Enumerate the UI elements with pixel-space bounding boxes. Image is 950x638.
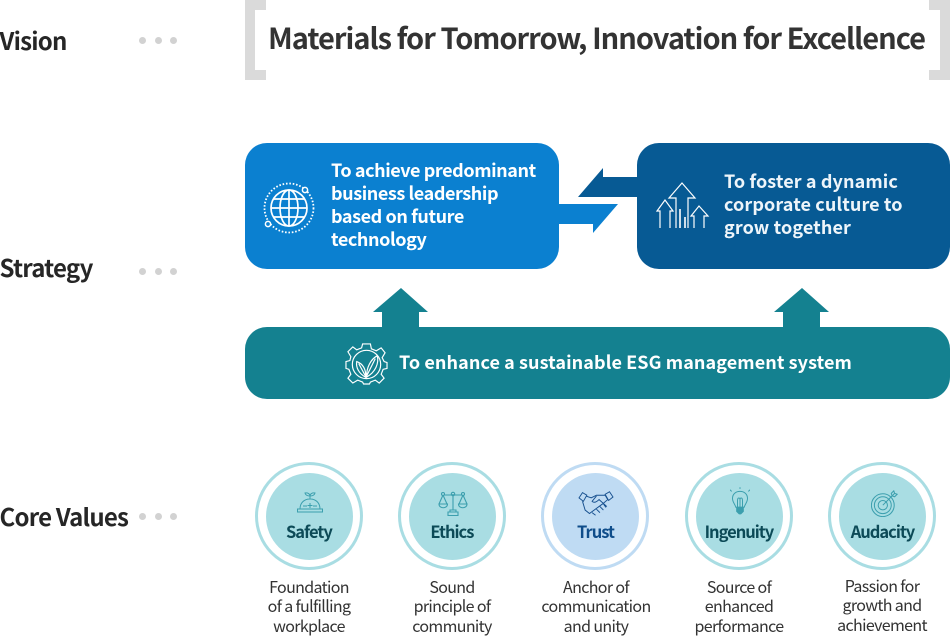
text: Safety description: of a fulfilling [268,593,350,617]
text: Trust description: and unity [564,613,628,637]
core value: Ethics [398,462,506,570]
vision statement: Materials for Tomorrow, Innovation for Excellence [268,16,925,58]
text: business leadership: based on future [331,203,464,229]
heading: Vision: Vision [0,22,67,57]
icon: light bulb [730,487,750,514]
left bracket [245,0,266,80]
text: corporate culture: grow together [724,214,851,240]
text: Ethics description: principle of [414,593,490,617]
text: Audacity description: Passion for [845,573,919,597]
text: business leadership: To achieve predominant [331,157,536,183]
text: Ingenuity description [694,574,784,637]
label: Audacity: Audacity [851,519,914,543]
core value: Trust [541,462,649,570]
panel: ESG [245,327,950,399]
text: Trust description: Anchor of [563,574,629,598]
text: corporate culture [724,168,903,240]
text: Trust description: communication [541,593,651,617]
icon: handshake [578,491,614,516]
label: Ethics: Ethics [430,519,473,543]
text: corporate culture: corporate culture to [724,191,903,217]
icon: scales [438,492,468,516]
text: corporate culture: To foster a dynamic [724,168,898,194]
text: Safety description: Foundation [269,574,349,598]
text: business leadership: business leadership [331,180,498,206]
text: Audacity description [837,573,928,636]
dots: Vision [139,37,177,44]
text: Audacity description: achievement [837,612,927,636]
core value: Safety [255,462,363,570]
text: Ingenuity description: enhanced [705,593,773,617]
label: Ingenuity: Ingenuity [705,519,773,543]
arrow: ESG to corporate culture [774,288,829,327]
dots: Strategy [139,268,177,275]
panel: corporate culture [637,143,950,269]
icon: target [871,490,898,517]
text: Audacity description: growth and [842,592,922,616]
arrow: blue to dark [559,204,618,233]
text: Ingenuity description: Source of [707,574,771,598]
text: Ethics description: community [412,613,492,637]
core value: Ingenuity [685,462,793,570]
right bracket [929,0,950,80]
heading: Core Values: Core Values [0,498,128,533]
text: business leadership [331,157,536,252]
text: Safety description: workplace [273,613,345,637]
arrow: dark to blue [578,168,637,197]
panel: business leadership [245,143,559,269]
heading: Strategy: Strategy [0,249,93,284]
icon: globe [264,182,314,234]
icon: gear with leaves [345,343,388,385]
core value: Audacity [828,462,936,570]
text: Safety description [268,574,351,637]
text: Ingenuity description: performance [694,613,784,637]
text: Ethics description: Sound [429,574,475,598]
text: Ethics description [412,574,492,637]
icon: helmet with sprout [297,492,323,512]
icon: growth arrows [656,182,710,228]
text: ESG: To enhance a sustainable ESG management system [399,349,852,375]
label: Safety: Safety [286,519,332,543]
vision statement panel [245,0,950,80]
text: Trust description [541,574,651,637]
arrow: ESG to business leadership [373,288,428,327]
dots: Core Values [139,513,177,520]
text: business leadership: technology [331,226,426,252]
label: Trust: Trust [577,519,614,543]
